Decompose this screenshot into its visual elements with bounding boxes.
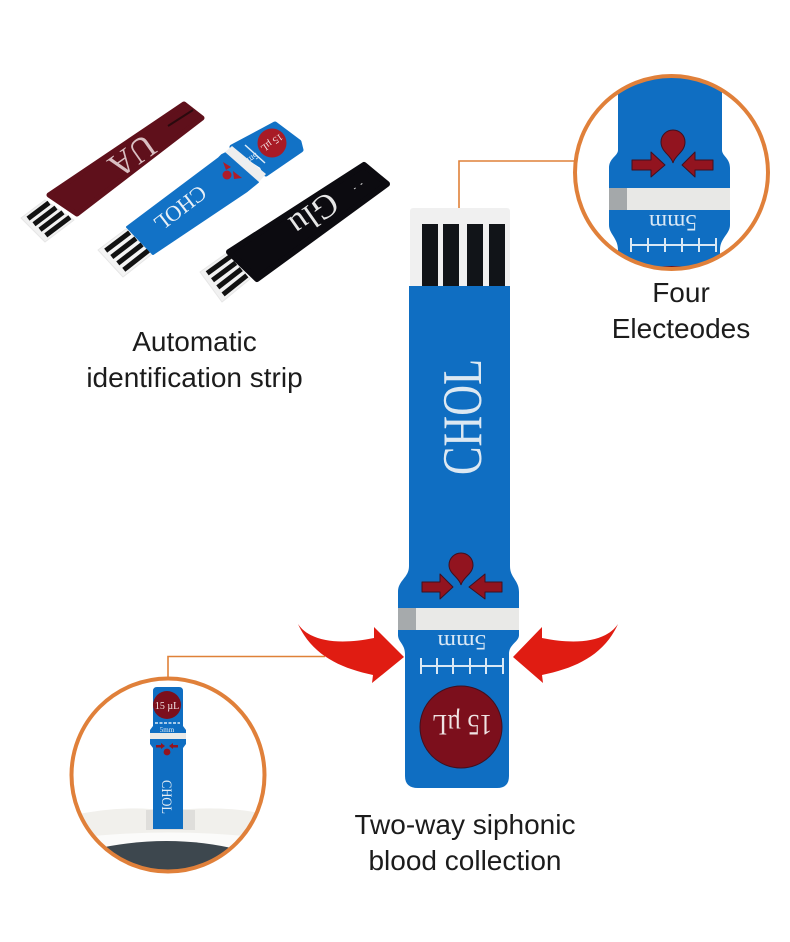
callout: strip in meter circle	[70, 676, 266, 874]
callout: strip in meter circle: CHOL	[158, 780, 174, 814]
strip: UA maroon	[21, 104, 202, 242]
strip: CHOL blue: 15 µL	[258, 131, 285, 154]
strip: Glu black	[200, 165, 387, 302]
strip: CHOL blue: 5mm	[240, 151, 260, 169]
label: four electrodes: Electeodes	[612, 313, 750, 344]
main strip: CHOL: 15 µL	[432, 708, 492, 741]
callout: strip in meter circle: 15 µL	[155, 701, 179, 712]
callout: electrodes zoom circle	[575, 70, 768, 275]
label: two-way siphonic blood collection: blood collection	[368, 845, 562, 876]
main strip: CHOL: CHOL	[432, 359, 494, 475]
callout: strip in meter circle: 5mm	[160, 726, 175, 734]
strip: Glu black: Glu	[282, 184, 345, 243]
arrow: right red	[513, 624, 618, 683]
leader line: meter inset	[168, 656, 325, 679]
strip: CHOL blue: CHOL	[149, 180, 212, 237]
strip: UA maroon: UA	[101, 126, 162, 185]
arrow: left red	[298, 624, 404, 683]
main strip: CHOL	[398, 208, 519, 788]
callout: electrodes zoom circle: 5mm	[649, 210, 697, 235]
main strip: CHOL: 5mm	[438, 630, 486, 655]
label: four electrodes: Four	[652, 277, 710, 308]
label: two-way siphonic blood collection: Two-way siphonic	[355, 809, 575, 840]
strip: CHOL blue	[98, 124, 301, 277]
label: automatic identification strip: identification strip	[86, 362, 303, 393]
label: automatic identification strip: Automatic	[132, 326, 257, 357]
leader line: electrodes	[459, 161, 575, 208]
